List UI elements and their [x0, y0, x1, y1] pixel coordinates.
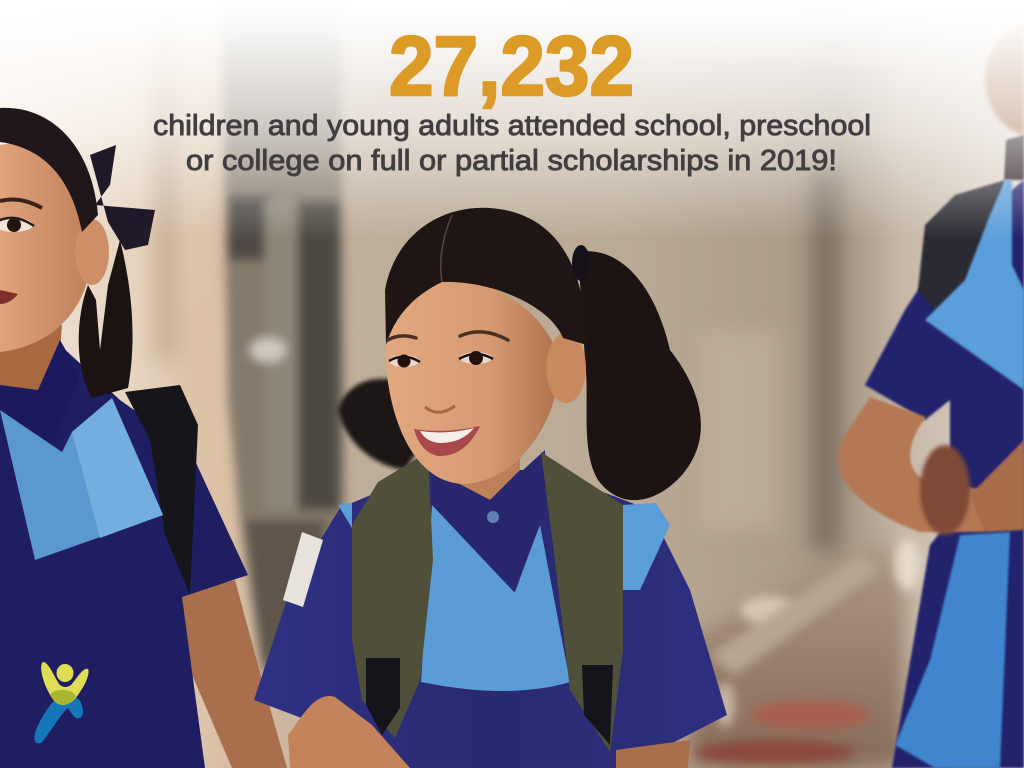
subtitle line 1: children and young adults attended school, preschool [153, 110, 871, 142]
right girl: hand [970, 440, 1024, 532]
centre girl: left eye [389, 354, 420, 368]
centre girl: right eye [459, 351, 493, 365]
left girl [0, 108, 287, 768]
centre girl: ear [546, 333, 586, 403]
left girl: arm [178, 580, 287, 768]
centre girl: ponytail [578, 251, 701, 500]
left girl: hair [0, 108, 98, 232]
pole [222, 0, 345, 690]
left girl: collar [0, 340, 80, 452]
centre girl: right forearm [616, 740, 690, 768]
logo: head [56, 664, 74, 682]
centre girl: face [385, 274, 560, 484]
right girl: face [985, 25, 1024, 135]
centre girl: neck [440, 440, 520, 500]
subtitle line 2: or college on full or partial scholarships in 2019! [186, 145, 837, 177]
centre girl: smile [414, 426, 480, 456]
right girl: hair strand [1004, 135, 1024, 180]
centre girl: right backpack strap [541, 452, 623, 752]
subtitle [153, 110, 871, 177]
centre girl: hair parting [441, 215, 452, 282]
left girl: blue scarf [0, 398, 163, 560]
logo [34, 662, 89, 743]
centre girl: sleeve badge [283, 532, 323, 607]
centre girl: eyebrows [388, 332, 508, 340]
right girl: lower scarf [895, 532, 1010, 768]
centre girl: hair tie [572, 245, 590, 281]
left girl: mouth [0, 290, 18, 304]
right girl: shirt and skirt [865, 180, 1024, 768]
right girl: hand shadow [920, 445, 970, 535]
centre girl: blue shoulder panels [622, 503, 670, 590]
centre girl: side ponytail [338, 379, 425, 470]
left girl: eye [0, 218, 34, 232]
top white fade [0, 0, 1024, 240]
centre girl [254, 208, 727, 768]
right girl [838, 25, 1024, 768]
right girl: arm [838, 397, 985, 532]
centre girl: right buckle [582, 665, 613, 745]
centre girl: blue scarf [421, 505, 570, 691]
left girl: eyebrow [0, 200, 42, 208]
left girl: face [0, 143, 92, 352]
centre girl: hair top [385, 208, 587, 345]
centre girl: nose [425, 406, 455, 412]
right girl: upper scarf [925, 180, 1024, 390]
centre girl: shirt [254, 470, 727, 768]
logo: blue legs [34, 696, 83, 743]
left girl: neck [0, 325, 62, 392]
logo: green arms [41, 662, 89, 705]
centre girl: strap buckles [366, 658, 400, 735]
left girl: braid [79, 240, 133, 398]
left girl: ear [75, 219, 109, 285]
centre girl: shirt button [487, 511, 499, 523]
centre girl: left backpack strap [352, 452, 433, 738]
left girl: uniform [0, 345, 248, 768]
right girl: backpack strap [918, 180, 1005, 335]
centre girl: collar placket [432, 450, 545, 592]
centre girl: hand [288, 696, 410, 768]
headline number: 27,232 [389, 19, 634, 113]
left girl: backpack strap [125, 385, 198, 595]
logo: overlap [50, 690, 76, 705]
left girl: hair bow [90, 145, 155, 250]
